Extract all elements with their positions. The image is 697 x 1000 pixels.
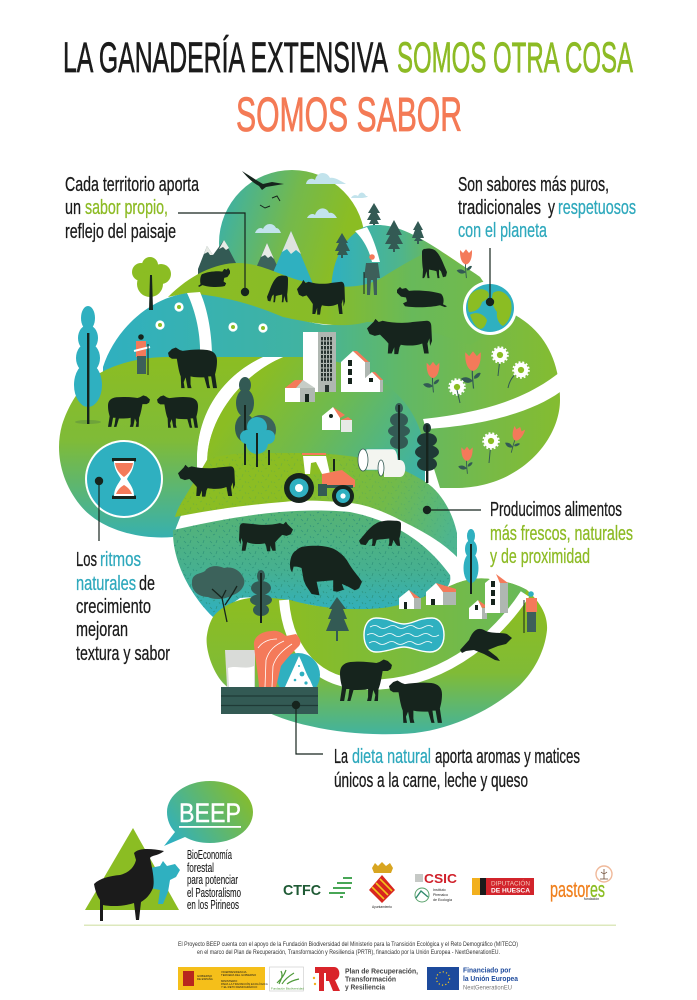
speckled field — [173, 510, 450, 617]
logo: Diputación de Huesca: DIPUTACIÓN — [491, 878, 530, 888]
callout: territorio text — [65, 174, 200, 243]
front meadow — [168, 250, 520, 345]
callout: sabores text: con el planeta — [458, 220, 548, 242]
logo: Gobierno de España: PARA LA TRANSICIÓN ECOLÓGICA — [221, 981, 268, 986]
callout: territorio text: Cada territorio aporta — [65, 174, 200, 196]
logo: Fundación Biodiversidad: Fundación Biodiversidad — [271, 986, 304, 990]
meat — [254, 631, 300, 687]
logo: pastores: pastor — [550, 877, 590, 902]
orange vest shepherd — [134, 334, 150, 375]
white lower road — [284, 594, 525, 685]
running sheep — [460, 629, 512, 661]
sheep lower right — [157, 395, 198, 428]
callout: dieta text: únicos a la carne, leche y queso — [334, 770, 528, 792]
callout: ritmos text: naturales — [76, 573, 136, 595]
town hill — [207, 357, 425, 485]
top round hill — [219, 170, 365, 316]
callout: sabores text: y — [548, 197, 555, 219]
logo: Gobierno de España: VICEPRESIDENCIA — [221, 970, 247, 974]
logo: pastores: es — [590, 877, 605, 902]
back right hill — [331, 225, 480, 300]
callout: frescos text: Producimos alimentos — [490, 499, 622, 521]
logo: CTFC: CTFC — [283, 882, 321, 899]
cow left of tractor — [178, 465, 235, 497]
logo: CSIC — [415, 872, 457, 902]
tractor field — [175, 453, 457, 557]
tall building — [303, 332, 336, 392]
logo: NextGenerationEU: la Unión Europea — [463, 976, 518, 983]
sheep bottom left — [340, 660, 392, 701]
logo tagline: el Pastoralismo — [187, 886, 241, 900]
logo: NextGenerationEU: Financiado por — [463, 968, 511, 974]
funding statement — [178, 942, 518, 956]
blue cow — [150, 861, 180, 904]
shepherd bottom right — [524, 591, 537, 633]
grazing cow top — [267, 275, 288, 302]
logo: Gobierno de España: TERCERA DEL GOBIERNO — [221, 973, 257, 977]
lime tree — [132, 257, 171, 310]
callout line: sabores — [486, 248, 494, 306]
logo: Fundación Biodiversidad — [270, 967, 304, 991]
logo: Gobierno de España: DE ESPAÑA — [197, 976, 213, 981]
pine tree bottom — [326, 597, 349, 641]
funding statement: El Proyecto BEEP cuenta con el apoyo de la Fundación Biodiversidad del Ministerio para la Transición Ecológica y el Reto Demográfico (MITECO) — [178, 942, 518, 948]
callout: ritmos text: crecimiento — [76, 596, 151, 618]
logo: municipal shield — [369, 862, 395, 909]
callout line: dieta — [292, 701, 323, 754]
field speckle texture — [173, 510, 450, 617]
hay bales — [358, 449, 405, 477]
callout: ritmos text: mejoran — [76, 619, 128, 641]
logo: Gobierno de España: GOBIERNO — [197, 974, 213, 978]
title — [63, 34, 633, 142]
callout: sabores text: tradicionales — [458, 197, 541, 219]
grazing cow field right — [359, 520, 401, 546]
logo: CSIC: Pirenaico — [433, 893, 448, 897]
callout: sabores text: respetuosos — [558, 197, 636, 219]
big grazing cow — [290, 546, 362, 595]
logo: BEEP — [85, 781, 253, 921]
tractor field texture — [175, 453, 457, 557]
logo: Diputación de Huesca — [472, 878, 534, 895]
pond — [364, 618, 444, 652]
cow field left — [239, 522, 293, 551]
white curved road — [197, 357, 283, 462]
logo: CSIC: de Ecología — [433, 898, 452, 902]
houses group town — [341, 351, 383, 392]
callout: territorio text: reflejo del paisaje — [65, 221, 176, 243]
grazing cow right — [422, 249, 447, 278]
tractor — [284, 453, 355, 507]
standing cow right — [367, 319, 432, 354]
globe icon — [463, 281, 517, 335]
callout: ritmos text: Los — [76, 549, 97, 571]
callout: dieta text — [334, 746, 580, 792]
logo: pastores — [550, 866, 612, 902]
logo: Plan de Recuperación — [313, 966, 418, 992]
callout line: territorio — [178, 213, 249, 296]
callout: territorio text: un — [65, 197, 81, 219]
logo: NextGenerationEU — [427, 967, 518, 992]
divider — [84, 924, 616, 926]
callout: ritmos text: ritmos — [100, 549, 141, 571]
logo: CSIC: CSIC — [424, 872, 457, 886]
callout: dieta text: dieta natural — [352, 746, 431, 768]
callout: ritmos text: de — [139, 573, 155, 595]
sheep bottom right — [389, 681, 442, 723]
logo: pastores: fundación — [584, 897, 599, 901]
callout: territorio text: sabor propio, — [85, 197, 168, 219]
callout: sabores text: Son sabores más puros, — [458, 174, 609, 196]
small white daisies — [155, 302, 268, 333]
shepherd top — [364, 254, 380, 295]
funding statement: en el marco del Plan de Recuperación, Transformación y Resiliencia (PRTR), financiado por la Unión Europea - NextGenerationEU. — [197, 950, 500, 956]
clouds — [255, 173, 368, 233]
bottom blob — [207, 578, 547, 734]
white track in band — [187, 292, 212, 358]
callout: ritmos text — [76, 549, 170, 665]
sheep lower left — [108, 395, 150, 427]
food crate — [221, 631, 320, 714]
black sheep — [94, 849, 164, 921]
top pine — [367, 203, 381, 227]
back road — [355, 227, 380, 262]
callout: dieta text: La — [334, 746, 349, 768]
BEEP wordmark: BEEP — [179, 798, 241, 828]
lying cow right — [397, 287, 447, 307]
cypress blue left — [74, 306, 102, 424]
wordmark underline — [179, 826, 241, 828]
wildflowers — [423, 347, 529, 474]
house left — [285, 380, 315, 402]
logo tagline: forestal — [187, 861, 214, 875]
cheese — [276, 653, 320, 697]
small birds — [260, 196, 280, 208]
back pine trees — [335, 220, 424, 258]
band and right blob — [103, 277, 560, 488]
hourglass icon — [85, 440, 163, 518]
logo tagline: en los Pirineos — [187, 898, 239, 912]
triangle — [85, 828, 179, 910]
dark trees centre right — [388, 403, 439, 483]
house centre — [322, 407, 352, 432]
logo: CSIC: Instituto — [433, 888, 446, 892]
mountains — [198, 231, 313, 284]
logo tagline: para potenciar — [187, 873, 238, 887]
callout: frescos text — [490, 499, 633, 568]
logo: Gobierno de España — [178, 967, 268, 990]
callout: frescos text: más frescos, naturales — [490, 523, 633, 545]
left lower hill — [59, 357, 263, 538]
dark tree bottom — [250, 570, 272, 623]
speech bubble — [164, 781, 253, 846]
logo: NextGenerationEU: NextGenerationEU — [463, 984, 512, 992]
milk glass — [225, 650, 255, 687]
callout: frescos text: y de proximidad — [490, 546, 590, 568]
blue cypress bottom right — [464, 529, 478, 594]
logo: Plan de Recuperación: Plan de Recuperación, — [345, 966, 418, 976]
logo: CTFC — [283, 878, 352, 899]
logo: Gobierno de España: Y EL RETO DEMOGRÁFICO — [221, 985, 258, 989]
callout line: frescos — [423, 506, 481, 514]
title line 2 coral: SOMOS SABOR — [236, 89, 462, 142]
logo: Gobierno de España: MINISTERIO — [221, 979, 238, 983]
callout: sabores text — [458, 174, 636, 242]
sheep middle — [168, 347, 217, 388]
bush tree — [192, 566, 244, 622]
title line 1 black: LA GANADERÍA EXTENSIVA — [63, 34, 388, 82]
eagle — [242, 171, 284, 190]
callout line: ritmos — [95, 477, 103, 541]
logo: municipal shield: Ayuntamiento — [372, 905, 392, 909]
logo tagline: BioEconomía — [187, 848, 232, 862]
logo: Plan de Recuperación: Transformación — [345, 974, 396, 984]
village bottom — [399, 574, 508, 619]
logo: Diputación de Huesca: DE HUESCA — [491, 888, 530, 894]
landscape illustration — [59, 170, 560, 734]
logo tagline — [187, 848, 241, 912]
right white road — [423, 372, 560, 429]
logo: Plan de Recuperación: y Resiliencia — [345, 982, 386, 992]
inner meadow — [290, 578, 527, 681]
crate planks — [221, 687, 318, 714]
standing cow top — [297, 280, 345, 315]
callout: ritmos text: textura y sabor — [76, 643, 170, 665]
trees centre left — [235, 377, 276, 467]
callout: dieta text: aporta aromas y matices — [435, 746, 580, 768]
lying cow top — [198, 268, 230, 287]
tulip near globe — [457, 249, 472, 278]
